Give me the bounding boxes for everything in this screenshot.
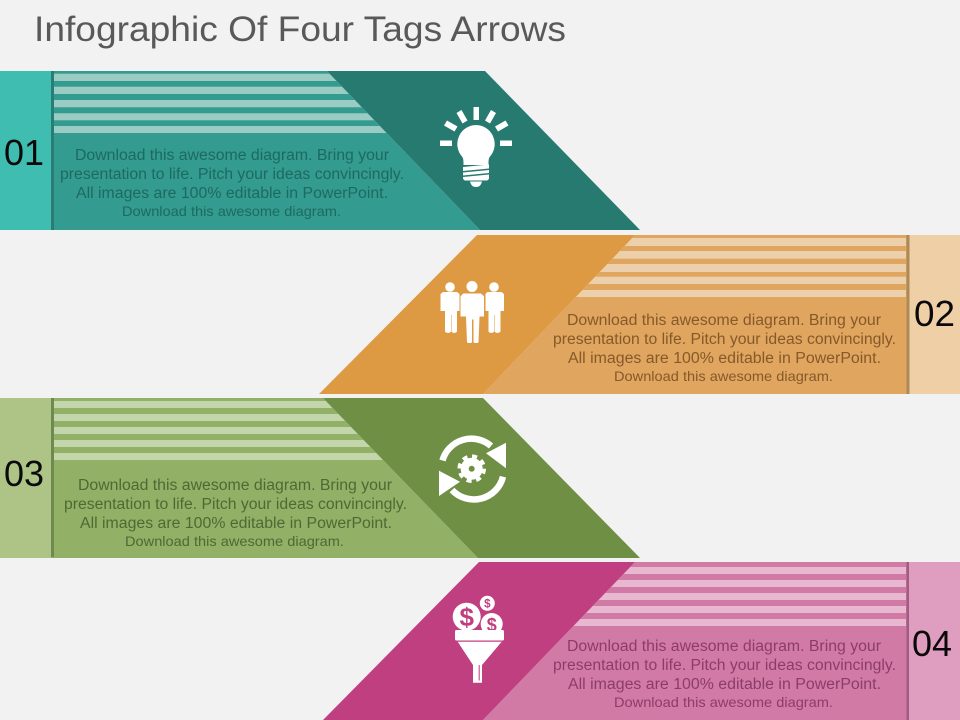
description 01: Download this awesome diagram. [122,204,341,219]
panel: tag 03 [0,398,640,558]
stripes 03 [54,401,382,460]
description 02: Download this awesome diagram. [614,369,833,384]
description 02: presentation to life. Pitch your ideas convincingly. [553,331,896,348]
description 01 [60,147,404,219]
number tab 01: 01 [4,132,44,173]
description 02: All images are 100% editable in PowerPoint. [568,350,881,367]
description 01: presentation to life. Pitch your ideas convincingly. [60,166,404,183]
description 01: Download this awesome diagram. Bring your [75,147,389,164]
title: Infographic Of Four Tags Arrows [34,9,566,49]
description 04: Download this awesome diagram. Bring your [567,638,881,655]
stripes 02 [576,238,906,297]
icon: money funnel: $ [487,615,497,635]
number tab 01 [0,71,51,230]
number tab 04: 04 [912,623,952,664]
text body background 04 [483,562,909,720]
description 03: All images are 100% editable in PowerPoint. [80,515,392,532]
description 03 [64,477,407,549]
description 04: Download this awesome diagram. [614,695,833,710]
arrow 01 [327,71,640,230]
description 04 [553,638,896,710]
text body background 02 [483,235,909,394]
description 01: All images are 100% editable in PowerPoint. [76,185,388,202]
stripes 01 [54,74,386,133]
number tab 03 [0,398,51,558]
description 04: presentation to life. Pitch your ideas convincingly. [553,657,896,674]
icon: money funnel [453,596,504,683]
description 03: Download this awesome diagram. Bring your [78,477,392,494]
icon: three people [440,281,504,344]
panel: tag 04 [323,562,960,720]
arrow 04 [323,562,635,720]
panel: tag 01 [0,71,640,230]
description 02 [553,312,896,384]
number tab 03: 03 [4,453,44,494]
stripes 04 [574,567,906,626]
text body background 01 [51,71,480,230]
icon: gear with cycle arrows [439,439,506,499]
icon: light bulb [440,107,512,187]
arrow 03 [323,398,640,558]
description 04: All images are 100% editable in PowerPoint. [568,676,881,693]
description 02: Download this awesome diagram. Bring your [567,312,881,329]
number tab 02: 02 [914,293,955,334]
description 03: Download this awesome diagram. [125,534,344,549]
arrow 02 [319,235,635,394]
panel: tag 02 [319,235,960,394]
text body background 03 [51,398,478,558]
icon: money funnel: $ [459,602,474,632]
number tab 04 [909,562,960,720]
icon: money funnel: $ [484,598,491,610]
number tab 02 [909,235,960,394]
description 03: presentation to life. Pitch your ideas convincingly. [64,496,407,513]
